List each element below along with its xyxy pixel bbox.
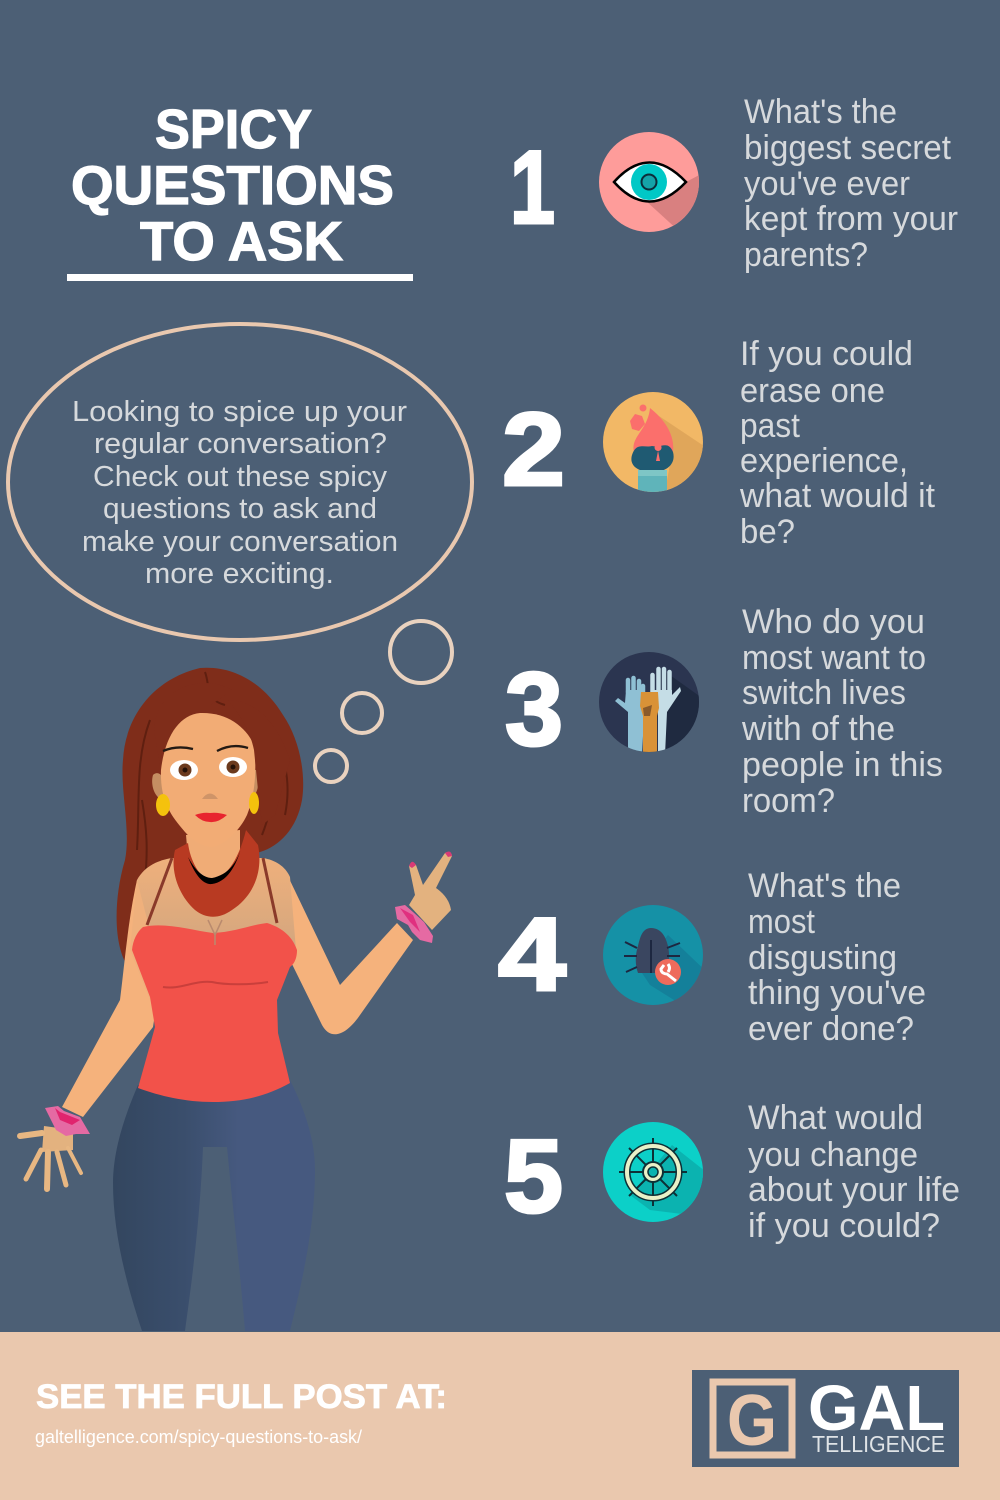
icon: paint brush flame xyxy=(603,392,703,492)
question 2 xyxy=(739,335,936,551)
eyebrows xyxy=(163,746,248,751)
question 3: switch lives xyxy=(742,674,906,712)
title: QUESTIONS xyxy=(71,154,394,216)
question 2: what would it xyxy=(739,477,936,515)
neck xyxy=(186,830,240,884)
icon: raised hands xyxy=(599,652,699,752)
question 1: parents? xyxy=(744,236,868,274)
title underline xyxy=(67,274,413,281)
question 1: What's the xyxy=(744,93,897,131)
question 4: ever done? xyxy=(748,1010,914,1048)
hair back xyxy=(117,668,303,965)
icon: ship wheel xyxy=(603,1122,710,1222)
intro text: questions to ask and xyxy=(103,493,377,525)
top wrinkle xyxy=(163,982,268,988)
question 2: experience, xyxy=(740,442,908,480)
right hand xyxy=(409,852,452,930)
question 4: What's the xyxy=(748,867,901,905)
intro text: more exciting. xyxy=(145,558,334,590)
title: TO ASK xyxy=(140,210,343,272)
question 3: people in this xyxy=(742,746,943,784)
question 5: you change xyxy=(748,1136,918,1174)
torso skin xyxy=(132,858,296,950)
red top xyxy=(132,923,297,1102)
nose xyxy=(202,794,218,799)
right scrunchie xyxy=(395,905,433,943)
ears xyxy=(152,770,259,800)
lips xyxy=(195,813,227,822)
intro text: make your conversation xyxy=(82,526,398,558)
question 2: If you could xyxy=(740,335,913,373)
question 2: erase one xyxy=(740,372,885,410)
icon: bug with wrench xyxy=(603,905,703,1005)
number 4: 4 xyxy=(498,897,566,1013)
icon: eye xyxy=(599,132,699,232)
logo: G xyxy=(727,1381,777,1461)
number 3: 3 xyxy=(505,652,563,768)
thought bubble with intro text xyxy=(8,324,472,640)
necklace xyxy=(208,920,222,945)
number 2: 2 xyxy=(502,392,565,508)
intro text: regular conversation? xyxy=(94,428,387,460)
dress straps xyxy=(147,858,277,925)
question 3 xyxy=(741,603,943,820)
number 5: 5 xyxy=(504,1119,563,1235)
question 4: most xyxy=(748,903,815,941)
title xyxy=(71,98,394,272)
question 3: Who do you xyxy=(742,603,925,641)
question 2: past xyxy=(740,407,801,445)
footer url: galtelligence.com/spicy-questions-to-ask/ xyxy=(35,1427,362,1447)
question 1: kept from your xyxy=(744,200,958,238)
right arm xyxy=(285,870,413,1034)
question 2: be? xyxy=(740,513,795,551)
title: SPICY xyxy=(155,98,312,160)
logo: GAL xyxy=(808,1372,945,1444)
question 1: you've ever xyxy=(744,165,910,203)
question 5: What would xyxy=(748,1099,923,1137)
left arm xyxy=(62,880,165,1117)
question 5 xyxy=(748,1099,960,1245)
question 4: disgusting xyxy=(748,939,897,977)
question 3: with of the xyxy=(741,710,895,748)
pants xyxy=(113,1080,315,1331)
number 1: 1 xyxy=(510,130,555,246)
question 1 xyxy=(744,93,958,274)
left hand xyxy=(20,1126,81,1189)
question 3: most want to xyxy=(742,639,926,677)
intro text: Check out these spicy xyxy=(93,461,388,493)
eyes xyxy=(170,757,247,780)
hair strands xyxy=(137,672,288,880)
scarf xyxy=(174,830,259,917)
hair fringe xyxy=(154,683,232,765)
question 5: if you could? xyxy=(748,1207,940,1245)
face xyxy=(161,713,255,847)
footer band xyxy=(0,1332,1000,1500)
question 4 xyxy=(748,867,926,1048)
question 1: biggest secret xyxy=(744,129,952,167)
footer heading: SEE THE FULL POST AT: xyxy=(36,1378,447,1416)
scarf inner shadow xyxy=(188,845,242,884)
thought bubble trail xyxy=(315,621,452,782)
left scrunchie xyxy=(45,1106,90,1136)
woman illustration xyxy=(20,668,452,1331)
intro text xyxy=(72,396,407,590)
earrings xyxy=(156,792,259,816)
logo xyxy=(692,1370,959,1467)
intro text: Looking to spice up your xyxy=(72,396,407,428)
question 4: thing you've xyxy=(748,974,926,1012)
question 3: room? xyxy=(742,782,835,820)
logo: TELLIGENCE xyxy=(812,1431,945,1457)
question 5: about your life xyxy=(748,1171,960,1209)
